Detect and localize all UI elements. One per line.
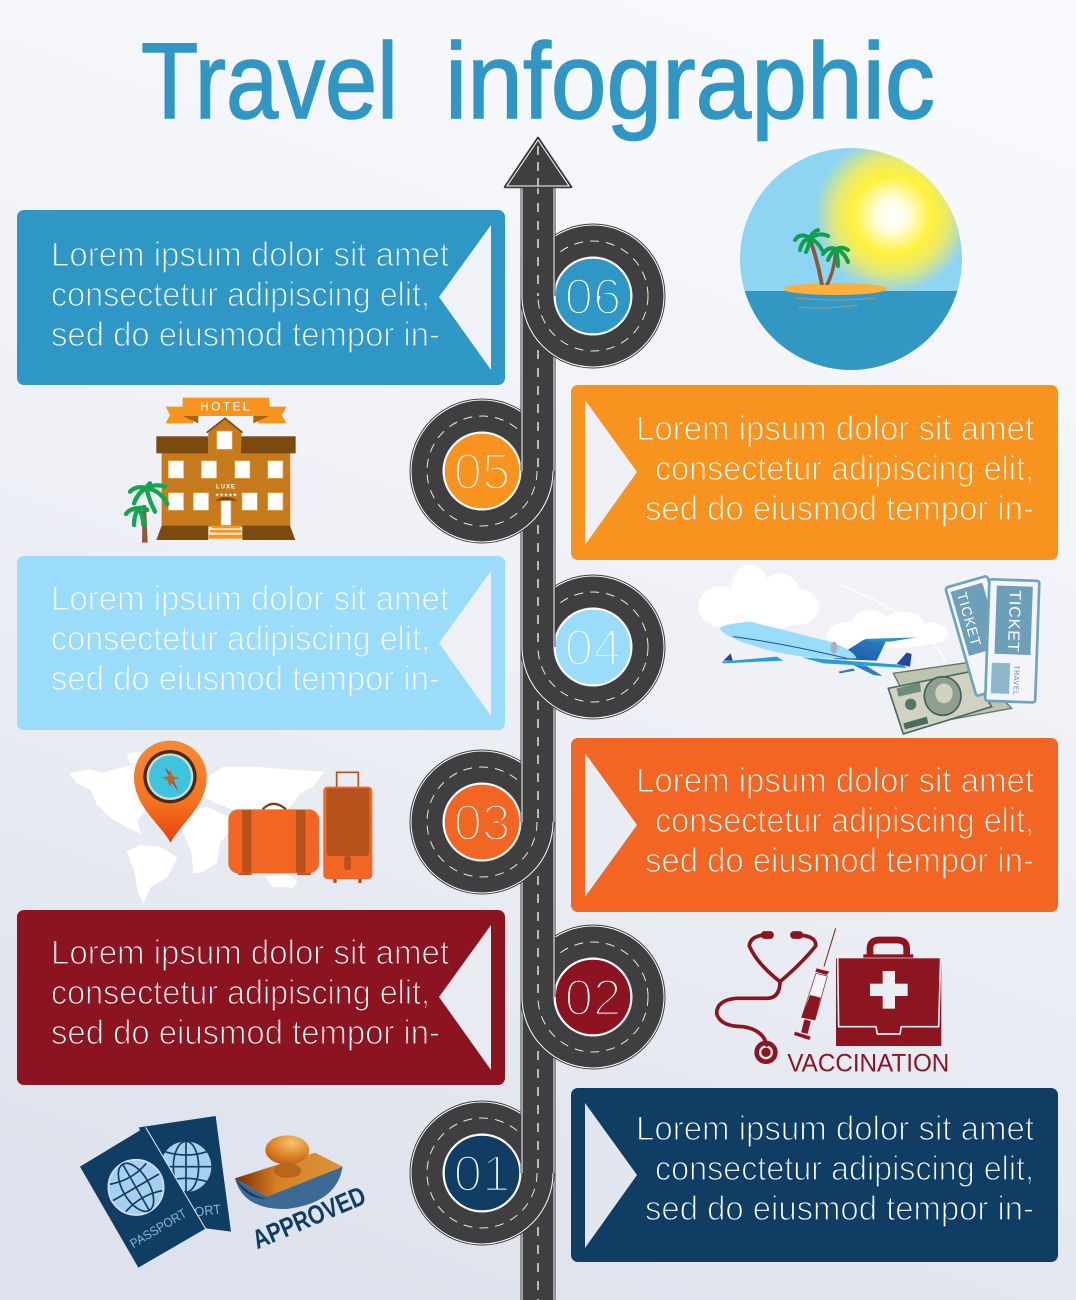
title: Travel (141, 20, 398, 141)
panel: step 03: Lorem ipsum dolor sit amet (636, 762, 1035, 800)
clouds (698, 565, 948, 663)
panel: step 02: sed do eiusmod tempor in- (51, 1014, 440, 1052)
icon: passports and approved stamp (80, 1116, 370, 1268)
panel: step 03: consectetur adipiscing elit, (655, 802, 1034, 840)
passports: ORT (194, 1201, 222, 1220)
panel: step 02: consectetur adipiscing elit, (51, 974, 430, 1012)
title (141, 20, 935, 141)
road stop 05 (427, 416, 537, 526)
icon: plane, tickets and money (698, 565, 1039, 734)
plane (719, 622, 917, 676)
tickets: TICKET (1004, 590, 1023, 652)
panel: step 04: consectetur adipiscing elit, (51, 620, 430, 658)
road stop 06 (538, 241, 648, 351)
panel: step 02: Lorem ipsum dolor sit amet (51, 934, 450, 972)
panel: step 06: Lorem ipsum dolor sit amet (51, 236, 450, 274)
rubber stamp (235, 1135, 343, 1209)
arrow head (505, 138, 571, 187)
road stop 06: 06 (565, 268, 621, 325)
panel: step 01: sed do eiusmod tempor in- (645, 1190, 1034, 1228)
world map (69, 752, 325, 904)
icon: hotel (126, 398, 296, 543)
road stop 01 (427, 1118, 537, 1228)
road stop 02 (538, 942, 648, 1052)
road stop 02: 02 (565, 969, 621, 1026)
palm tree (126, 483, 167, 543)
tickets (945, 576, 1039, 703)
hotel ribbon (166, 398, 287, 423)
panel: step 05: sed do eiusmod tempor in- (645, 490, 1034, 528)
suitcase (228, 804, 319, 875)
location pin (134, 741, 207, 843)
passports (80, 1116, 231, 1268)
hotel ribbon: HOTEL (200, 400, 252, 414)
panel: step 05: consectetur adipiscing elit, (655, 450, 1034, 488)
syringe (794, 928, 836, 1040)
icon: vaccination kit (717, 928, 949, 1078)
road stop 03 (427, 767, 537, 877)
panel: step 06: sed do eiusmod tempor in- (51, 316, 440, 354)
panel: step 06 (17, 210, 505, 385)
stethoscope (717, 933, 816, 1062)
passports: PASSPORT (128, 1206, 189, 1251)
road stop 05: 05 (454, 443, 510, 500)
panel: step 02 (17, 910, 505, 1085)
road stop 04: 04 (565, 619, 621, 676)
panel: step 05: Lorem ipsum dolor sit amet (636, 410, 1035, 448)
panel: step 06: consectetur adipiscing elit, (51, 276, 430, 314)
road stop 03: 03 (454, 794, 510, 851)
panel: step 03: sed do eiusmod tempor in- (645, 842, 1034, 880)
icon: map, compass pin and luggage (69, 741, 372, 904)
icon: tropical island (740, 137, 970, 371)
approved label: APPROVED (248, 1180, 370, 1255)
panel: step 01: Lorem ipsum dolor sit amet (636, 1110, 1035, 1148)
panel: step 05 (571, 385, 1058, 560)
road stop 01: 01 (454, 1145, 510, 1202)
panel: step 04: Lorem ipsum dolor sit amet (51, 580, 450, 618)
panel: step 03 (571, 738, 1058, 912)
title: infographic (445, 20, 935, 141)
icon: hotel: ★★★★★ (215, 493, 238, 499)
winding road timeline (427, 138, 648, 1300)
tickets: TICKET (954, 590, 985, 648)
panel: step 04: sed do eiusmod tempor in- (51, 660, 440, 698)
medical case (836, 940, 941, 1046)
trolley bag (323, 772, 372, 883)
panel: step 01: consectetur adipiscing elit, (655, 1150, 1034, 1188)
tickets: TRAVEL (1011, 665, 1021, 695)
vaccination label: VACCINATION (787, 1050, 949, 1078)
panel: step 01 (571, 1088, 1058, 1262)
dollar bills (888, 663, 1012, 734)
icon: hotel: LUXE (216, 485, 236, 491)
road stop 04 (538, 592, 648, 702)
panel: step 04 (17, 556, 505, 730)
